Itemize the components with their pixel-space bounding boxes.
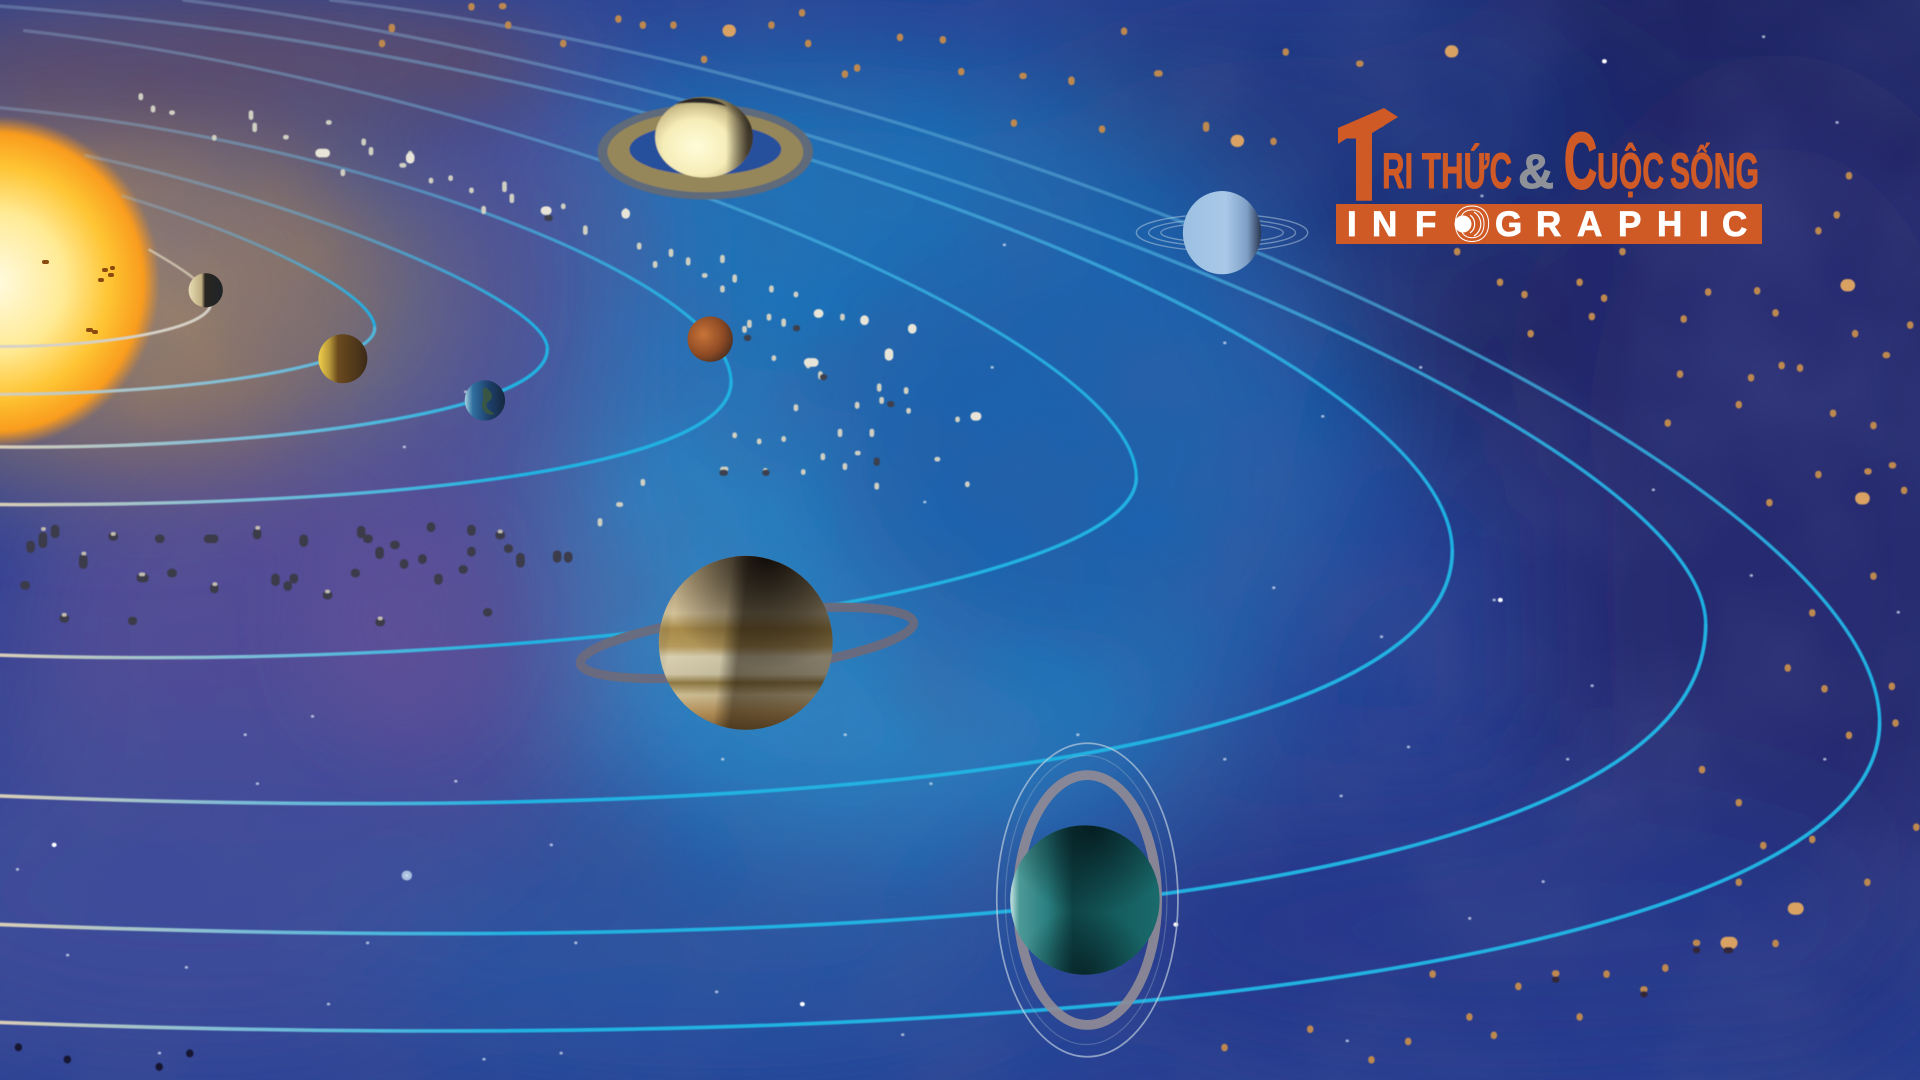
sun bbox=[0, 116, 160, 448]
icon: letter O as concentric rings: O bbox=[1453, 196, 1491, 252]
logo wordmark: & bbox=[1518, 146, 1554, 199]
infographic banner: INF bbox=[1347, 205, 1436, 244]
logo wordmark: T bbox=[1332, 102, 1396, 223]
logo wordmark: SỐNG bbox=[1670, 142, 1759, 199]
inner asteroid belt: pale rocks bbox=[141, 96, 977, 524]
orbit: Uranus bbox=[0, 0, 1706, 934]
planet: Mercury bbox=[189, 273, 223, 307]
asteroid belt: dark rocks bbox=[24, 527, 568, 622]
logo wordmark: UỘC bbox=[1597, 142, 1664, 199]
planet: Uranus with vertical rings bbox=[997, 743, 1178, 1057]
planet: Saturn with rings bbox=[598, 97, 813, 200]
orbit: Mars bbox=[0, 108, 731, 505]
orbit: Mercury bbox=[0, 250, 211, 347]
orbit: Saturn bbox=[0, 6, 1452, 804]
infographic banner bbox=[1336, 196, 1762, 252]
planet: Jupiter with ring bbox=[577, 556, 917, 730]
infographic banner: GRAPHIC bbox=[1495, 205, 1747, 244]
orbit: Venus bbox=[0, 196, 375, 394]
logo: Tri thức & Cuộc sống Infographic bbox=[1336, 108, 1762, 244]
planet: Earth bbox=[465, 380, 505, 421]
orbit: Jupiter bbox=[0, 31, 1136, 658]
logo wordmark: RI THỨC bbox=[1382, 143, 1512, 199]
logo wordmark bbox=[1338, 108, 1758, 201]
planet: Neptune with thin rings bbox=[1136, 191, 1308, 274]
orbit: Earth bbox=[0, 156, 547, 447]
planet: Mars bbox=[688, 317, 733, 362]
logo wordmark: C bbox=[1564, 116, 1597, 205]
planet: Venus bbox=[318, 334, 367, 383]
